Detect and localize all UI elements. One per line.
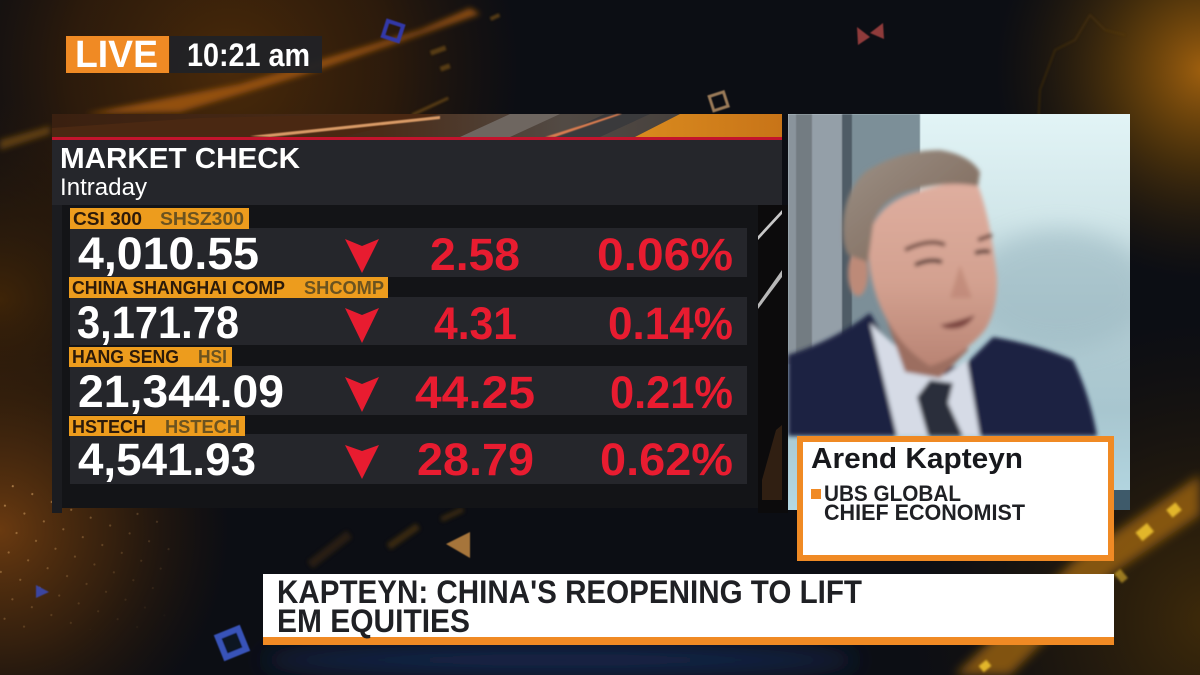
- row: Hang Seng: [69, 346, 747, 418]
- headline banner: [263, 574, 1114, 645]
- chart marks top right: [1035, 15, 1125, 190]
- icon: blue diamond top: [383, 21, 403, 41]
- icon: blue triangle: [36, 585, 49, 598]
- row: HSTECH: HSTECH: [72, 416, 146, 437]
- row: Hang Seng: HSI: [198, 346, 227, 367]
- man: [788, 150, 1097, 436]
- row: HSTECH: [69, 416, 747, 485]
- row: China Shanghai Comp: 3,171.78: [77, 297, 239, 348]
- headline banner: EM EQUITIES: [277, 603, 470, 639]
- speaker name: Arend Kapteyn: [811, 443, 1023, 475]
- window view: [788, 114, 1150, 510]
- speaker role: CHIEF ECONOMIST: [824, 500, 1026, 525]
- subheading: Intraday: [60, 174, 147, 201]
- row: CSI 300: CSI 300: [73, 208, 142, 229]
- eyebrows and eyes: [905, 235, 992, 250]
- mouth: [940, 315, 975, 329]
- nose shadow: [951, 268, 970, 298]
- panel: speaker video: [788, 114, 1150, 510]
- row: HSTECH: 0.62%: [600, 434, 733, 485]
- ear: [848, 250, 868, 296]
- row: CSI 300: 4,010.55: [78, 228, 259, 279]
- shirt: [870, 323, 980, 436]
- row: Hang Seng: 44.25: [415, 367, 535, 418]
- headline banner: KAPTEYN: CHINA'S REOPENING TO LIFT: [277, 574, 862, 610]
- neck: [887, 322, 970, 380]
- window frame: [788, 114, 920, 364]
- orange light streaks: [0, 8, 480, 150]
- row: HSTECH: 28.79: [417, 434, 534, 485]
- icon: blue diamond bottom: [218, 629, 246, 657]
- row: Hang Seng: HANG SENG: [72, 346, 179, 367]
- golden diagonal band: [955, 475, 1200, 675]
- row: China Shanghai Comp: SHCOMP: [304, 277, 384, 298]
- row: HSTECH: HSTECH: [165, 416, 240, 437]
- bullet: [811, 489, 821, 499]
- row: CSI 300: 0.06%: [597, 229, 733, 280]
- row: Hang Seng: 0.21%: [610, 367, 733, 418]
- heading: MARKET CHECK: [60, 143, 300, 175]
- icon: tan diamond: [709, 92, 728, 111]
- hair: [843, 150, 980, 262]
- row: China Shanghai Comp: CHINA SHANGHAI COMP: [72, 277, 285, 298]
- row: China Shanghai Comp: 0.14%: [608, 298, 733, 349]
- live badge: LIVE: [75, 34, 158, 76]
- time badge: 10:21 am: [187, 37, 310, 73]
- icon: tan triangle: [446, 532, 470, 558]
- face: [868, 182, 997, 366]
- tie: [917, 380, 963, 436]
- row: China Shanghai Comp: [69, 277, 747, 349]
- name plate: [800, 439, 1111, 558]
- row: China Shanghai Comp: 4.31: [434, 298, 517, 349]
- icon: red bow tie: [857, 23, 884, 45]
- row: CSI 300: 2.58: [430, 229, 520, 280]
- panel: market check: [52, 114, 788, 513]
- speaker role: UBS GLOBAL: [824, 481, 961, 506]
- row: CSI 300: SHSZ300: [160, 208, 244, 229]
- row: CSI 300: [70, 208, 747, 280]
- speaker role: [824, 481, 1026, 525]
- suit: [788, 313, 1097, 436]
- row: Hang Seng: 21,344.09: [78, 366, 284, 417]
- row: HSTECH: 4,541.93: [78, 434, 256, 485]
- dim ticker marks: [411, 13, 500, 116]
